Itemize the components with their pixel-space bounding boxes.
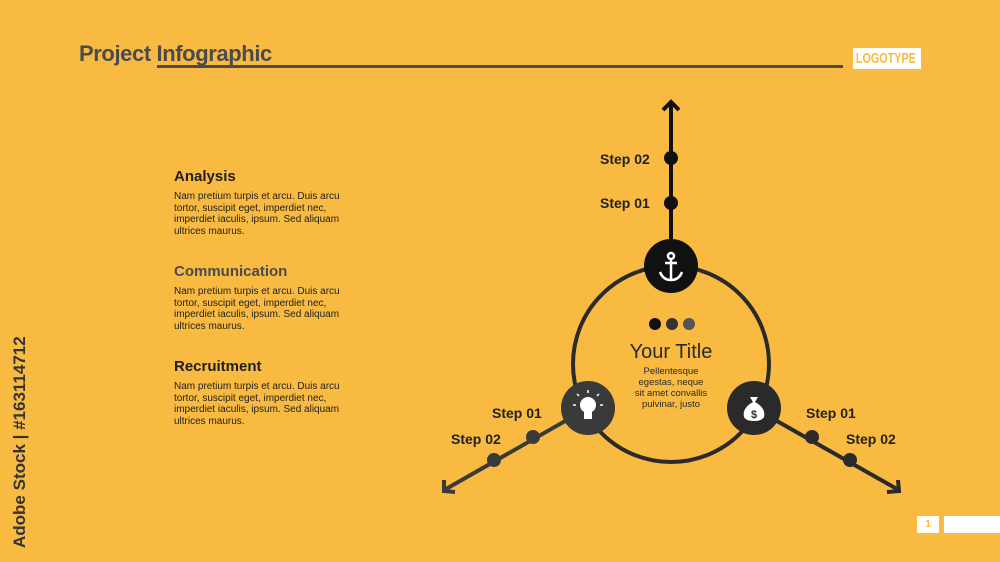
center title: pulvinar, justo — [642, 399, 700, 410]
text block: recruitment — [174, 358, 340, 426]
text block: communication: Nam pretium turpis et arcu. Duis arcu tortor, suscipit eget, imperdiet nec, imperdiet iaculis, ipsum. Sed aliquam ultrices maurus. — [174, 286, 340, 332]
icon node: money bag: $ — [751, 409, 757, 421]
icon node: lightbulb — [561, 381, 615, 435]
step labels: Step 02 — [451, 431, 501, 447]
page number: 1 — [925, 519, 931, 530]
text block: analysis — [174, 168, 340, 236]
step labels: Step 01 — [806, 405, 856, 421]
step labels — [451, 151, 896, 447]
footer bar — [944, 516, 1000, 533]
title: Project Infographic — [79, 41, 272, 66]
text block: communication — [174, 263, 340, 332]
center title: egestas, neque — [639, 377, 703, 388]
arrow: right — [754, 408, 899, 492]
step labels: Step 01 — [492, 405, 542, 421]
text block: analysis: Nam pretium turpis et arcu. Duis arcu tortor, suscipit eget, imperdiet nec, imperdiet iaculis, ipsum. Sed aliquam ultrices maurus. — [174, 191, 340, 236]
center title: Pellentesque — [644, 366, 698, 377]
center title: sit amet convallis — [635, 388, 707, 399]
center title: Your Title — [630, 341, 712, 363]
text block: recruitment: Recruitment — [174, 358, 262, 375]
logotype: LOGOTYPE — [856, 50, 916, 67]
text block: communication: Communication — [174, 263, 287, 280]
page number — [917, 516, 939, 533]
step labels: Step 01 — [600, 195, 650, 211]
watermark vertical text: Adobe Stock | #163114712 — [10, 336, 29, 548]
step labels: Step 02 — [600, 151, 650, 167]
step labels: Step 02 — [846, 431, 896, 447]
text block: recruitment: Nam pretium turpis et arcu. Duis arcu tortor, suscipit eget, imperdiet nec, imperdiet iaculis, ipsum. Sed aliquam ultrices maurus. — [174, 381, 340, 426]
main circle — [573, 266, 769, 462]
title underline — [157, 65, 843, 68]
icon node: money bag — [727, 381, 781, 435]
icon node: anchor — [644, 239, 698, 293]
dots — [649, 318, 695, 330]
arrow: left — [444, 408, 588, 492]
text block: analysis: Analysis — [174, 168, 236, 185]
center title — [630, 341, 712, 410]
arrow: top — [663, 102, 679, 245]
step dots — [487, 151, 857, 467]
